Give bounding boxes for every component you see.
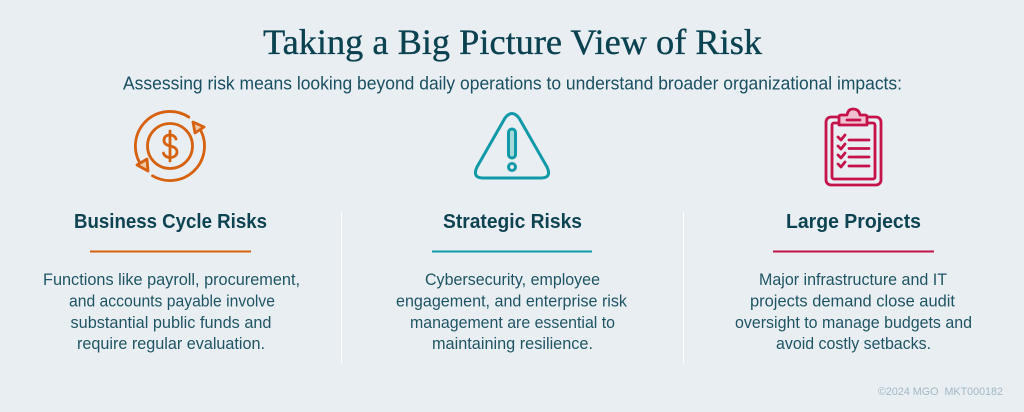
panel: strategic risks — [396, 114, 628, 353]
body text — [396, 271, 628, 353]
heading: Large Projects — [786, 211, 921, 233]
title: Taking a Big Picture View of Risk — [263, 22, 762, 62]
divider — [683, 212, 684, 363]
accent rule — [773, 250, 934, 252]
body text: maintaining resilience. — [432, 335, 593, 353]
body text: require regular evaluation. — [77, 335, 265, 353]
body text: Functions like payroll, procurement, — [43, 271, 300, 289]
subtitle: Assessing risk means looking beyond daily operations to understand broader organizational impacts: — [123, 72, 902, 94]
panel: business cycle risks — [43, 111, 300, 353]
icon: clipboard checklist — [826, 109, 881, 185]
panel: large projects — [735, 109, 972, 353]
icon: circular dollar arrows — [135, 111, 205, 181]
icon: warning triangle — [475, 114, 549, 178]
body text: engagement, and enterprise risk — [396, 292, 628, 310]
body text: substantial public funds and — [70, 314, 272, 332]
body text: and accounts payable involve — [69, 292, 275, 310]
divider — [341, 212, 342, 363]
body text: management are essential to — [410, 314, 615, 332]
accent rule — [432, 250, 592, 252]
body text: avoid costly setbacks. — [776, 335, 931, 353]
body text — [43, 271, 300, 353]
body text: projects demand close audit — [750, 292, 956, 310]
body text: Major infrastructure and IT — [759, 271, 947, 289]
heading: Strategic Risks — [443, 211, 582, 233]
body text: oversight to manage budgets and — [735, 314, 972, 332]
heading: Business Cycle Risks — [74, 211, 267, 233]
accent rule — [90, 250, 251, 252]
footer credit: ©2024 MGO MKT000182 — [878, 386, 1003, 398]
body text: Cybersecurity, employee — [425, 271, 600, 289]
body text — [735, 271, 972, 353]
